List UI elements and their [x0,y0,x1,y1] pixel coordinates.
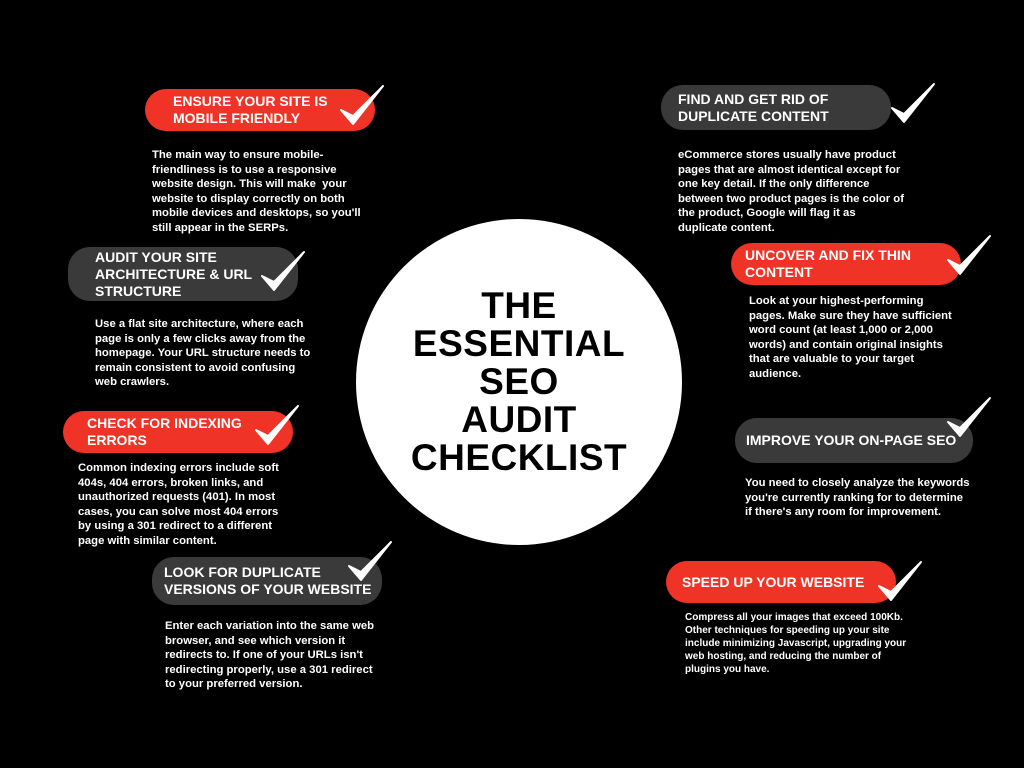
text: architecture: page is only a few clicks away from the [95,332,305,344]
text: duplicate versions: redirects to. If one of your URLs isn't [165,649,363,661]
pill: indexing: ERRORS [87,432,147,448]
text: architecture [95,318,310,388]
pill: duplicate content: FIND AND GET RID OF [678,90,828,106]
text: mobile: mobile devices and desktops, so you'll [152,207,361,219]
text: indexing: 404s, 404 errors, broken links, and [78,476,263,488]
text: on-page [745,477,970,518]
icon: check 1 [340,85,384,125]
text: speed: Other techniques for speeding up your site [685,625,889,636]
text: architecture: remain consistent to avoid confusing [95,362,295,374]
text: architecture: homepage. Your URL structure needs to [95,347,310,359]
pill: thin content: UNCOVER AND FIX THIN [745,247,911,263]
text: speed: include minimizing Javascript, upgrading your [685,638,906,649]
icon: check 3 [255,405,299,445]
center circle title: THE [481,285,557,326]
text: on-page: you're currently ranking for to determine [745,492,963,504]
pill: duplicate content: DUPLICATE CONTENT [678,108,829,124]
center circle title: AUDIT [461,399,577,440]
icon: check 2 [261,251,305,291]
pill: architecture [68,247,298,301]
icon: check 7 [947,397,991,437]
text: mobile: still appear in the SERPs. [152,222,288,234]
text: duplicate content: one key detail. If the only difference [678,178,869,190]
text: speed: web hosting, and reducing the number of [685,651,881,662]
text: thin content: words) and contain original insights [749,338,943,350]
pill: indexing: CHECK FOR INDEXING [87,415,242,431]
text: architecture: web crawlers. [95,376,169,388]
text: duplicate content: the product, Google will flag it as [678,207,856,219]
text: indexing [78,462,279,546]
text: mobile: website design. This will make your [152,178,347,190]
text: mobile: The main way to ensure mobile- [152,149,323,161]
pill: duplicate versions [152,557,382,605]
text: indexing: page with similar content. [78,534,217,546]
icon: check 8 [878,561,922,601]
center circle title: ESSENTIAL [413,323,625,364]
text: duplicate content [678,149,904,234]
text: thin content: pages. Make sure they have sufficient [749,310,952,322]
pill: architecture: STRUCTURE [95,282,181,298]
text: duplicate content: pages that are almost identical except for [678,164,900,176]
text: on-page: You need to closely analyze the keywords [745,477,970,489]
pill: duplicate versions: VERSIONS OF YOUR WEBSITE [164,581,371,597]
pill: on-page SEO [735,418,973,463]
text: architecture: Use a flat site architecture, where each [95,318,303,330]
pill: thin content: CONTENT [745,264,813,280]
text: indexing: by using a 301 redirect to a different [78,520,272,532]
center circle title: SEO [479,361,559,402]
icon: check 6 [947,235,991,275]
pill: architecture: ARCHITECTURE & URL [95,266,252,282]
pill: on-page SEO: IMPROVE YOUR ON-PAGE SEO [746,432,956,448]
text: on-page: if there's any room for improvement. [745,506,941,518]
text: mobile: friendliness is to use a responsive [152,164,337,176]
text: duplicate content: between two product pages is the color of [678,192,904,204]
text: speed: plugins you have. [685,664,769,675]
text: duplicate versions: browser, and see which version it [165,634,345,646]
text: thin content: that are valuable to your target [749,353,914,365]
center circle title [356,219,682,545]
pill: mobile friendly: MOBILE FRIENDLY [173,110,300,126]
pill: duplicate versions: LOOK FOR DUPLICATE [164,564,321,580]
text: thin content: Look at your highest-performing [749,295,923,307]
pill: indexing [63,411,293,453]
text: thin content: audience. [749,368,801,380]
pill: mobile friendly [145,89,375,131]
pill: mobile friendly: ENSURE YOUR SITE IS [173,93,328,109]
text: speed: Compress all your images that exceed 100Kb. [685,612,903,623]
center circle title: CHECKLIST [411,437,627,478]
pill: thin content [731,243,961,285]
text: duplicate versions: Enter each variation into the same web [165,620,374,632]
pill: speed: SPEED UP YOUR WEBSITE [682,574,864,590]
icon: check 4 [348,541,392,581]
text: duplicate versions [165,620,374,690]
text: indexing: unauthorized requests (401). In most [78,491,275,503]
pill: duplicate content [661,85,891,130]
pill: speed [666,561,896,603]
text: speed [685,612,906,675]
pill: architecture: AUDIT YOUR SITE [95,248,217,264]
text: mobile: website to display correctly on both [152,192,345,204]
text: indexing: cases, you can solve most 404 errors [78,506,278,518]
text: duplicate versions: redirecting properly, use a 301 redirect [165,664,373,676]
text: thin content [749,295,952,380]
icon: check 5 [891,83,935,123]
text: duplicate content: duplicate content. [678,222,775,234]
text: duplicate content: eCommerce stores usually have product [678,149,896,161]
text: indexing: Common indexing errors include soft [78,462,279,474]
text: duplicate versions: to your preferred version. [165,678,302,690]
text: mobile [152,149,361,234]
text: thin content: word count (at least 1,000 or 2,000 [749,324,933,336]
